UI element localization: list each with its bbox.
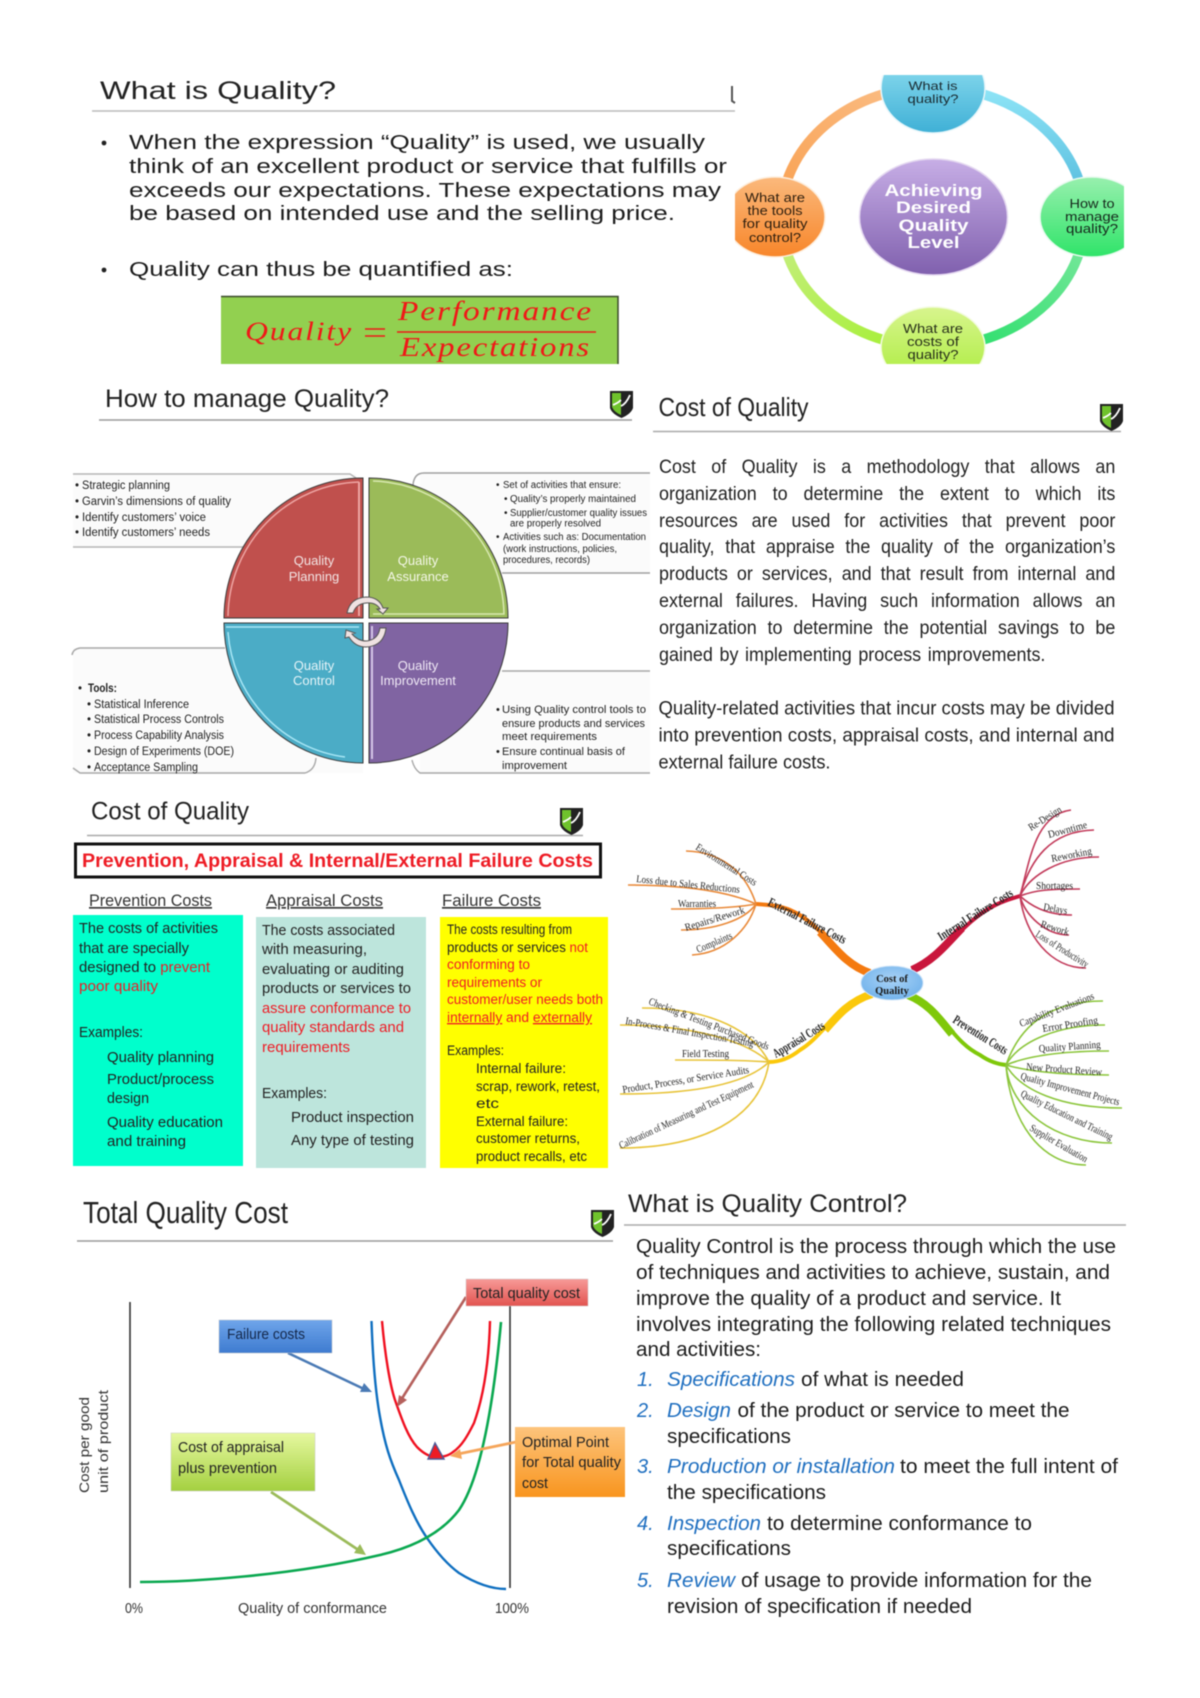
branch: prevention costs: Error Proofing xyxy=(1042,1015,1099,1035)
axis label: y xyxy=(76,1390,111,1493)
arrow: cycle bottom xyxy=(345,628,386,647)
panel: failure costs: The costs resulting from xyxy=(447,922,572,937)
panel: prevention costs: The costs of activities xyxy=(79,921,218,937)
icon: shield xyxy=(1100,404,1123,431)
branch: internal failure costs: Delays xyxy=(1042,902,1068,917)
callout: quality assurance: procedures, records) xyxy=(503,555,590,566)
panel: prevention costs: Product/process xyxy=(107,1072,214,1088)
callout: quality control: • xyxy=(78,683,82,695)
banner: Prevention, Appraisal and Internal/External Failure Costs xyxy=(76,844,600,877)
branch: appraisal costs: Field Testing xyxy=(682,1049,730,1060)
text block: cost of quality definition: gained by implementing process improvements. xyxy=(658,644,1045,666)
callout: quality assurance: • xyxy=(504,494,508,505)
icon: shield xyxy=(591,1210,614,1237)
callout: quality control xyxy=(72,648,363,774)
text block: quality-related activities: external failure costs. xyxy=(658,752,830,774)
callout: quality improvement: improvement xyxy=(502,760,567,772)
branch: appraisal costs: Appraisal Costs xyxy=(770,1018,827,1061)
quadrant: Quality Assurance: Assurance xyxy=(387,569,449,584)
node: What are the tools for quality control?: the tools xyxy=(748,204,802,218)
numbered list: related techniques: specifications xyxy=(667,1538,791,1560)
branch: prevention costs: Capability Evaluations xyxy=(1018,991,1096,1030)
numbered list: related techniques: Review xyxy=(667,1570,737,1592)
panel: prevention costs: poor quality xyxy=(79,979,159,995)
panel: quality management pie xyxy=(72,473,650,774)
quadrant: Quality Improvement: Improvement xyxy=(380,673,456,688)
node: What is quality?: What is xyxy=(908,79,958,93)
callout: quality improvement: • xyxy=(496,746,500,758)
callout: quality assurance: Activities such as: Documentation xyxy=(503,532,646,543)
callout: quality planning xyxy=(73,474,356,547)
branch: internal failure costs: Re-Design xyxy=(1027,804,1064,834)
branch: external failure costs: Warranties xyxy=(678,899,716,910)
numbered list: related techniques: of usage to provide information for the xyxy=(741,1570,1092,1592)
panel: failure costs: Failure Costs xyxy=(442,892,541,910)
heading: Total Quality Cost: Total Quality Cost xyxy=(83,1195,288,1230)
node: Cost of Quality: Cost of xyxy=(876,974,908,985)
branch: external failure costs: Loss due to Sales Reductions xyxy=(636,874,740,896)
node: How to manage quality?: manage xyxy=(1065,210,1119,224)
node: What are costs of quality?: What are xyxy=(903,322,963,336)
quadrant: Quality Improvement: Quality xyxy=(398,658,439,673)
branch: appraisal costs: Product, Process, or Service Audits xyxy=(622,1065,750,1096)
callout: quality assurance: Supplier/customer quality issues xyxy=(510,508,647,519)
branch: prevention costs: Prevention Costs xyxy=(950,1012,1011,1057)
panel: failure costs: customer returns, xyxy=(476,1131,580,1146)
panel: failure costs: customer/user needs both xyxy=(447,992,603,1007)
panel: prevention costs xyxy=(73,892,243,1166)
node: Cost of Quality: Quality xyxy=(875,986,910,997)
callout: quality control: • xyxy=(87,714,91,726)
callout: quality control: Acceptance Sampling xyxy=(94,762,198,774)
quadrant: Quality Control xyxy=(224,623,363,763)
callout: quality planning: Strategic planning xyxy=(82,480,170,492)
callout: quality control: Statistical Inference xyxy=(94,699,189,711)
node: What are the tools for quality control?: for quality xyxy=(742,217,808,231)
banner: Prevention, Appraisal and Internal/External Failure Costs: Prevention, Appraisal & Internal/External Failure Costs xyxy=(82,851,593,872)
heading: Cost of Quality (right): Cost of Quality xyxy=(658,392,808,422)
branch: internal failure costs: Rework xyxy=(1039,919,1071,939)
text block: quality definition bullets: be based on intended use and the selling price. xyxy=(129,203,675,225)
node: Achieving Desired Quality Level: Level xyxy=(908,233,960,252)
text block: quality control definition: and activities: xyxy=(636,1339,761,1361)
callout: quality control: Tools: xyxy=(88,683,117,695)
branch: internal failure costs: Downtime xyxy=(1047,820,1089,841)
text block: quality control definition: Quality Control is the process through which the use xyxy=(636,1236,1116,1258)
branch: prevention costs: Quality Education and Training xyxy=(1019,1089,1115,1143)
quadrant: Quality Planning xyxy=(224,478,363,618)
callout: quality assurance: are properly resolved xyxy=(510,518,601,530)
label: Failure costs: Failure costs xyxy=(227,1326,305,1343)
numbered list: related techniques: 3. xyxy=(637,1456,654,1478)
panel: appraisal costs: with measuring, xyxy=(261,942,367,958)
text block: quality definition bullets: exceeds our expectations. These expectations may xyxy=(129,180,721,202)
panel: appraisal costs: Appraisal Costs xyxy=(266,892,383,910)
panel: failure costs: internally and externally xyxy=(447,1010,592,1025)
axis label: y: unit of product xyxy=(95,1390,111,1493)
numbered list: related techniques xyxy=(636,1369,1118,1618)
panel: prevention costs: Quality planning xyxy=(107,1050,214,1066)
curve: failure costs xyxy=(372,1321,506,1589)
panel: prevention costs: design xyxy=(107,1091,149,1107)
quadrant: Quality Assurance: Quality xyxy=(398,553,439,568)
node: Achieving Desired Quality Level: Quality xyxy=(898,216,969,235)
node: How to manage quality?: quality? xyxy=(1066,222,1118,236)
node: How to manage quality?: How to xyxy=(1070,197,1115,211)
panel: failure costs: product recalls, etc xyxy=(476,1149,587,1164)
arrow: failure costs xyxy=(288,1353,372,1392)
label: Optimal Point for Total quality cost xyxy=(515,1427,625,1497)
branch: internal failure costs: Reworking xyxy=(1050,846,1093,865)
node: What are the tools for quality control? xyxy=(725,177,825,257)
label: Total quality cost: Total quality cost xyxy=(473,1285,581,1302)
mind map: cost of quality xyxy=(618,804,1122,1165)
callout: quality control: Design of Experiments (DOE) xyxy=(94,746,234,758)
marker: optimal point xyxy=(428,1443,444,1459)
numbered list: related techniques: 2. xyxy=(636,1400,654,1422)
numbered list: related techniques: Design xyxy=(667,1400,731,1422)
panel: failure costs: Internal failure: xyxy=(476,1061,566,1076)
label: Optimal Point for Total quality cost: for Total quality xyxy=(522,1454,621,1471)
callout: quality planning: Identify customers’ voice xyxy=(82,512,206,524)
formula: Quality = Performance / Expectations: Quality xyxy=(245,317,353,346)
callout: quality control: • xyxy=(87,730,91,742)
label: Failure costs xyxy=(219,1320,332,1353)
numbered list: related techniques: to determine conformance to xyxy=(767,1513,1032,1535)
curve: total quality cost xyxy=(382,1321,490,1457)
axes xyxy=(130,1302,510,1588)
callout: quality improvement: meet requirements xyxy=(502,731,598,743)
text block: cost of quality definition: external failures. Having such information allows an xyxy=(658,590,1115,612)
node: What are costs of quality?: quality? xyxy=(908,348,959,362)
label: Cost of appraisal plus prevention: Cost of appraisal xyxy=(178,1439,284,1456)
branch: prevention costs: Quality Planning xyxy=(1038,1040,1102,1055)
heading: What is Quality?: What is Quality? xyxy=(100,77,336,105)
axis label: x: 0% xyxy=(125,1601,143,1617)
numbered list: related techniques: revision of specification if needed xyxy=(667,1596,972,1618)
diagram: quality cycle xyxy=(734,74,1125,365)
panel: appraisal costs: Any type of testing xyxy=(291,1133,414,1149)
callout: quality control: Process Capability Analysis xyxy=(94,730,224,742)
branch: internal failure costs: Internal Failure Costs xyxy=(935,885,1016,944)
label: Cost of appraisal plus prevention xyxy=(171,1433,315,1491)
text block: cost of quality definition xyxy=(658,456,1116,666)
numbered list: related techniques: 4. xyxy=(637,1513,654,1535)
numbered list: related techniques: the specifications xyxy=(667,1482,826,1504)
text block: quality control definition xyxy=(636,1236,1116,1361)
branch: appraisal costs: Calibration of Measuring and Test Equipment xyxy=(618,1080,756,1152)
quadrant: Quality Assurance xyxy=(369,478,508,618)
callout: quality improvement: Using Quality control tools to xyxy=(502,704,646,716)
panel: failure costs: products or services not xyxy=(447,940,588,955)
numbered list: related techniques: of the product or service to meet the xyxy=(738,1400,1070,1422)
text block: cost of quality definition: products or services, and that result from internal and xyxy=(658,563,1115,585)
node: Cost of Quality xyxy=(861,966,923,1000)
branch: prevention costs xyxy=(908,991,1122,1165)
label: Optimal Point for Total quality cost: cost xyxy=(522,1475,549,1492)
panel: appraisal costs: requirements xyxy=(262,1040,350,1056)
text block: quality control definition: improve the quality of a product and service. It xyxy=(636,1288,1061,1310)
quadrant: Quality Control: Quality xyxy=(294,658,335,673)
quadrant: Quality Improvement xyxy=(369,623,508,763)
text block: quality control definition: of techniques and activities to achieve, sustain, and xyxy=(636,1262,1110,1284)
callout: quality assurance: Quality’s properly maintained xyxy=(510,494,636,505)
axis label: x: 100% xyxy=(495,1601,529,1617)
text block: quality-related activities xyxy=(658,698,1114,774)
ring segment: cyan xyxy=(984,90,1084,180)
quadrant: Quality Planning: Quality xyxy=(294,553,335,568)
node: What are the tools for quality control?: What are xyxy=(745,191,805,205)
numbered list: related techniques: Specifications xyxy=(667,1369,795,1391)
node: What are costs of quality?: costs of xyxy=(907,335,960,349)
panel: failure costs: requirements or xyxy=(447,975,542,990)
numbered list: related techniques: to meet the full intent of xyxy=(900,1456,1118,1478)
branch: appraisal costs xyxy=(618,994,872,1152)
panel: prevention costs: Examples: xyxy=(79,1025,143,1041)
callout: quality assurance: • xyxy=(496,532,500,543)
panel: appraisal costs: products or services to xyxy=(262,981,411,997)
formula: Quality = Performance / Expectations: Performance xyxy=(397,296,593,326)
panel: failure costs: etc xyxy=(476,1096,499,1111)
node: Achieving Desired Quality Level xyxy=(860,159,1008,275)
arrow: appraisal plus prevention xyxy=(271,1492,366,1555)
branch: internal failure costs: Loss of Productivity xyxy=(1033,929,1091,971)
text block: quality definition bullets: Quality can thus be quantified as: xyxy=(129,259,513,281)
text block: quality definition bullets: When the expression “Quality” is used, we usually xyxy=(129,132,705,154)
callout: quality control: • xyxy=(87,746,91,758)
callout: quality planning: Garvin’s dimensions of quality xyxy=(82,496,231,508)
chart: total quality cost curves xyxy=(76,1279,625,1617)
formula: Quality = Performance / Expectations: Expectations xyxy=(399,332,591,362)
label: Optimal Point for Total quality cost: Optimal Point xyxy=(522,1434,610,1451)
panel: failure costs: External failure: xyxy=(476,1114,568,1129)
text block: quality-related activities: Quality-related activities that incur costs may be divided xyxy=(658,698,1114,720)
numbered list: related techniques: 5. xyxy=(637,1570,654,1592)
callout: quality improvement: ensure products and services xyxy=(502,718,645,730)
arrow: cycle top xyxy=(347,597,388,614)
node: What is quality?: quality? xyxy=(908,92,959,106)
text block: quality control definition: involves integrating the following related techniques xyxy=(636,1314,1111,1336)
callout: quality improvement: Ensure continual basis of xyxy=(502,746,626,758)
text block: quality-related activities: into prevention costs, appraisal costs, and internal and xyxy=(658,724,1114,746)
panel: prevention costs: designed to prevent xyxy=(79,960,210,976)
callout: quality improvement xyxy=(412,671,650,773)
panel: failure costs: Examples: xyxy=(447,1043,504,1058)
branch: external failure costs: Complaints xyxy=(695,931,734,956)
icon: shield xyxy=(610,391,633,418)
numbered list: related techniques: Production or installation xyxy=(667,1456,895,1478)
branch: appraisal costs: Checking & Testing Purchased Goods xyxy=(647,997,770,1053)
panel: failure costs: scrap, rework, retest, xyxy=(476,1079,600,1094)
node: What are costs of quality? xyxy=(880,306,986,365)
label: Cost of appraisal plus prevention: plus prevention xyxy=(178,1460,277,1477)
text block: cost of quality definition: Cost of Quality is a methodology that allows an xyxy=(658,456,1115,478)
panel: prevention costs: and training xyxy=(107,1134,186,1150)
quadrant: Quality Control: Control xyxy=(293,673,335,688)
text block: quality definition bullets xyxy=(102,132,727,281)
label: Total quality cost xyxy=(466,1279,588,1306)
formula: Quality = Performance / Expectations xyxy=(221,296,618,364)
ring segment: lime xyxy=(782,254,884,345)
callout: quality assurance xyxy=(413,473,650,573)
numbered list: related techniques: Inspection xyxy=(667,1513,761,1535)
callout: quality control: • xyxy=(87,699,91,711)
panel: prevention costs: that are specially xyxy=(79,941,190,957)
panel: appraisal costs: Product inspection xyxy=(291,1110,414,1126)
node: Achieving Desired Quality Level: Desired xyxy=(896,198,971,217)
panel: failure costs xyxy=(440,892,608,1168)
curve: appraisal plus prevention xyxy=(140,1322,501,1582)
branch: external failure costs xyxy=(628,842,870,973)
panel: appraisal costs: evaluating or auditing xyxy=(262,962,404,978)
text block: cost of quality definition: organization to determine the potential savings to be xyxy=(658,617,1115,639)
heading: Cost of Quality (middle): Cost of Quality xyxy=(91,798,249,826)
panel: prevention costs: Prevention Costs xyxy=(89,892,212,910)
branch: prevention costs: New Product Review xyxy=(1026,1062,1103,1078)
callout: quality assurance: Set of activities that ensure: xyxy=(503,480,621,491)
icon: cropped shield remnant xyxy=(732,86,735,103)
node: How to manage quality? xyxy=(1039,176,1125,258)
panel: appraisal costs: quality standards and xyxy=(262,1020,404,1036)
callout: quality improvement: • xyxy=(496,704,500,716)
icon: shield xyxy=(560,808,583,835)
branch: prevention costs: Quality Improvement Projects xyxy=(1019,1071,1121,1108)
branch: external failure costs: Repairs/Rework xyxy=(684,905,747,934)
text block: cost of quality definition: resources are used for activities that prevent poor xyxy=(658,510,1115,532)
numbered list: related techniques: of what is needed xyxy=(801,1369,964,1391)
numbered list: related techniques: 1. xyxy=(637,1369,654,1391)
panel: appraisal costs: assure conformance to xyxy=(262,1001,411,1017)
quadrant: Quality Planning: Planning xyxy=(289,569,339,584)
node: What is quality? xyxy=(880,74,986,134)
arrow: optimal point xyxy=(450,1442,516,1459)
panel: appraisal costs xyxy=(256,892,426,1168)
panel: failure costs: conforming to xyxy=(447,957,530,972)
axis label: y: Cost per good xyxy=(76,1397,92,1493)
node: Achieving Desired Quality Level: Achieving xyxy=(884,181,982,200)
numbered list: related techniques: specifications xyxy=(667,1426,791,1448)
text block: cost of quality definition: organization to determine the extent to which its xyxy=(658,483,1115,505)
ring segment: orange xyxy=(782,89,882,180)
arrow: total quality cost xyxy=(397,1297,466,1407)
callout: quality assurance: (work instructions, policies, xyxy=(503,544,617,555)
callout: quality assurance: • xyxy=(496,480,500,491)
callout: quality control: • xyxy=(87,762,91,774)
axis label: x: Quality of conformance xyxy=(238,1601,387,1617)
panel: appraisal costs: The costs associated xyxy=(262,923,395,939)
branch: external failure costs: Environmental Costs xyxy=(693,842,759,889)
branch: internal failure costs: Shortages xyxy=(1036,881,1073,892)
branch: appraisal costs: In-Process & Final Inspection/Testing xyxy=(624,1016,755,1050)
branch: internal failure costs xyxy=(912,804,1099,971)
heading: How to manage Quality?: How to manage Quality? xyxy=(105,385,389,413)
callout: quality planning: • xyxy=(75,527,79,539)
callout: quality control: Statistical Process Controls xyxy=(94,714,224,726)
text block: cost of quality definition: quality, that appraise the quality of the organization’s xyxy=(658,536,1115,558)
branch: external failure costs: External Failure Costs xyxy=(766,894,849,947)
branch: prevention costs: Supplier Evaluation xyxy=(1028,1123,1090,1165)
callout: quality planning: Identify customers’ needs xyxy=(82,527,210,539)
panel: prevention costs: Quality education xyxy=(107,1115,223,1131)
panel: appraisal costs: Examples: xyxy=(262,1086,327,1102)
ring segment: green xyxy=(982,254,1084,345)
callout: quality planning: • xyxy=(75,512,79,524)
callout: quality planning: • xyxy=(75,480,79,492)
callout: quality planning: • xyxy=(75,496,79,508)
heading: What is Quality Control?: What is Quality Control? xyxy=(628,1190,907,1218)
callout: quality assurance: • xyxy=(504,508,508,519)
axis label: x xyxy=(125,1601,529,1617)
node: What are the tools for quality control?: control? xyxy=(749,231,801,245)
text block: quality definition bullets: think of an excellent product or service that fulfills or xyxy=(129,156,727,178)
